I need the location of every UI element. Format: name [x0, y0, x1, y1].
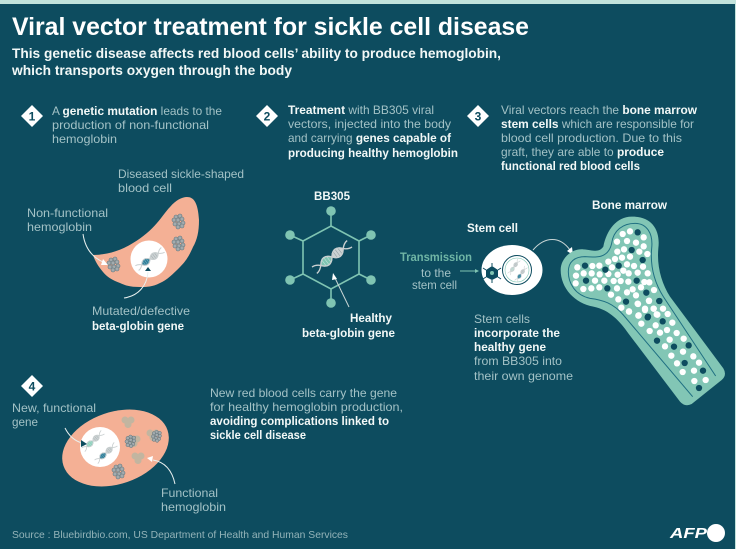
- step 4 text: for healthy hemoglobin production,: [210, 400, 403, 414]
- arrow: transmission: [460, 269, 479, 273]
- panel: step 2: [256, 103, 458, 340]
- subtitle: [11, 45, 501, 78]
- step 4 text: [210, 386, 403, 442]
- step 1 text: A genetic mutation leads to the: [52, 104, 222, 118]
- arrow: to functional hemoglobin: [147, 456, 175, 484]
- label: transmission: Transmission: [400, 250, 472, 264]
- label: diseased cell: [118, 167, 244, 195]
- sickle cell illustration: [93, 197, 199, 287]
- step 4 text: sickle cell disease: [210, 428, 306, 442]
- step 1 text: [52, 104, 222, 146]
- label: transmission: to the: [421, 266, 451, 280]
- AFP logo: AFP: [669, 525, 708, 542]
- step 3 text: Viral vectors reach the bone marrow: [501, 103, 698, 117]
- step 2 number badge: [256, 105, 278, 127]
- label: stem cells incorporate: [474, 312, 573, 383]
- step 3 text: [501, 103, 698, 173]
- label: stem cells incorporate: healthy gene: [474, 340, 546, 354]
- label: mutated gene: beta-globin gene: [92, 319, 184, 333]
- stem cell illustration: [482, 245, 542, 295]
- step 2 text: Treatment with BB305 viral: [288, 103, 434, 117]
- bone marrow illustration: [561, 217, 725, 405]
- label: new functional gene: [12, 401, 96, 429]
- label: diseased cell: Diseased sickle-shaped: [118, 167, 244, 181]
- arrow: to gene: [124, 267, 151, 298]
- step 3 text: blood cell production. Due to this: [501, 131, 682, 145]
- label: mutated gene: [92, 304, 190, 333]
- step 2 text: and carrying genes capable of: [288, 131, 452, 145]
- step 2 number badge: 2: [264, 110, 271, 124]
- label: new functional gene: gene: [12, 415, 38, 429]
- step 2 text: producing healthy hemoglobin: [288, 146, 458, 160]
- subtitle: which transports oxygen through the body: [11, 62, 292, 78]
- label: stem cell: Stem cell: [467, 221, 518, 235]
- step 4 number badge: [21, 375, 43, 397]
- panel: step 4: [12, 375, 403, 514]
- arrow: to hemoglobin: [83, 234, 108, 265]
- label: stem cells incorporate: Stem cells: [474, 312, 530, 326]
- step 4 number badge: 4: [29, 380, 36, 394]
- step 2 text: [288, 103, 458, 160]
- label: mutated gene: Mutated/defective: [92, 304, 190, 318]
- title: Viral vector treatment for sickle cell disease: [12, 13, 529, 41]
- label: non-functional hemoglobin: [27, 206, 108, 234]
- label: BB305: BB305: [314, 189, 350, 203]
- label: non-functional hemoglobin: hemoglobin: [27, 220, 92, 234]
- label: healthy gene: beta-globin gene: [302, 326, 395, 340]
- panel: step 1: [21, 104, 244, 333]
- step 3 text: stem cells which are responsible for: [501, 117, 694, 131]
- healthy red blood cell illustration: [52, 396, 179, 500]
- panel: step 3: [400, 103, 725, 405]
- viral vector hexagon: [285, 206, 376, 308]
- label: non-functional hemoglobin: Non-functional: [27, 206, 108, 220]
- label: stem cells incorporate: their own genome: [474, 369, 573, 383]
- label: healthy gene: [302, 311, 395, 340]
- step 1 text: production of non-functional: [52, 118, 209, 132]
- label: stem cells incorporate: incorporate the: [474, 326, 560, 340]
- label: new functional gene: New, functional: [12, 401, 96, 415]
- step 4 text: avoiding complications linked to: [210, 414, 389, 428]
- arrow: to new gene: [65, 428, 87, 447]
- step 2 text: vectors, injected into the body: [288, 117, 451, 131]
- source: Source : Bluebirdbio.com, US Department of Health and Human Services: [12, 529, 348, 541]
- label: stem cells incorporate: from BB305 into: [474, 354, 562, 368]
- step 3 text: graft, they are able to produce: [501, 145, 664, 159]
- label: functional hemoglobin: [161, 486, 226, 514]
- label: diseased cell: blood cell: [118, 181, 172, 195]
- label: transmission: stem cell: [412, 278, 457, 292]
- step 1 number badge: 1: [29, 110, 36, 124]
- step 4 text: New red blood cells carry the gene: [210, 386, 397, 400]
- label: functional hemoglobin: Functional: [161, 486, 218, 500]
- arrow: to healthy gene: [332, 273, 349, 307]
- label: bone marrow: Bone marrow: [592, 198, 668, 212]
- AFP logo: [669, 524, 725, 542]
- step 3 number badge: 3: [475, 110, 482, 124]
- arrow: to bone marrow: [533, 240, 573, 255]
- step 1 text: hemoglobin: [52, 132, 117, 146]
- label: transmission: [400, 250, 472, 292]
- label: functional hemoglobin: hemoglobin: [161, 500, 226, 514]
- subtitle: This genetic disease affects red blood cells’ ability to produce hemoglobin,: [12, 45, 501, 61]
- step 3 number badge: [467, 105, 489, 127]
- label: healthy gene: Healthy: [350, 311, 392, 325]
- step 1 number badge: [21, 105, 43, 127]
- step 3 text: functional red blood cells: [501, 159, 640, 173]
